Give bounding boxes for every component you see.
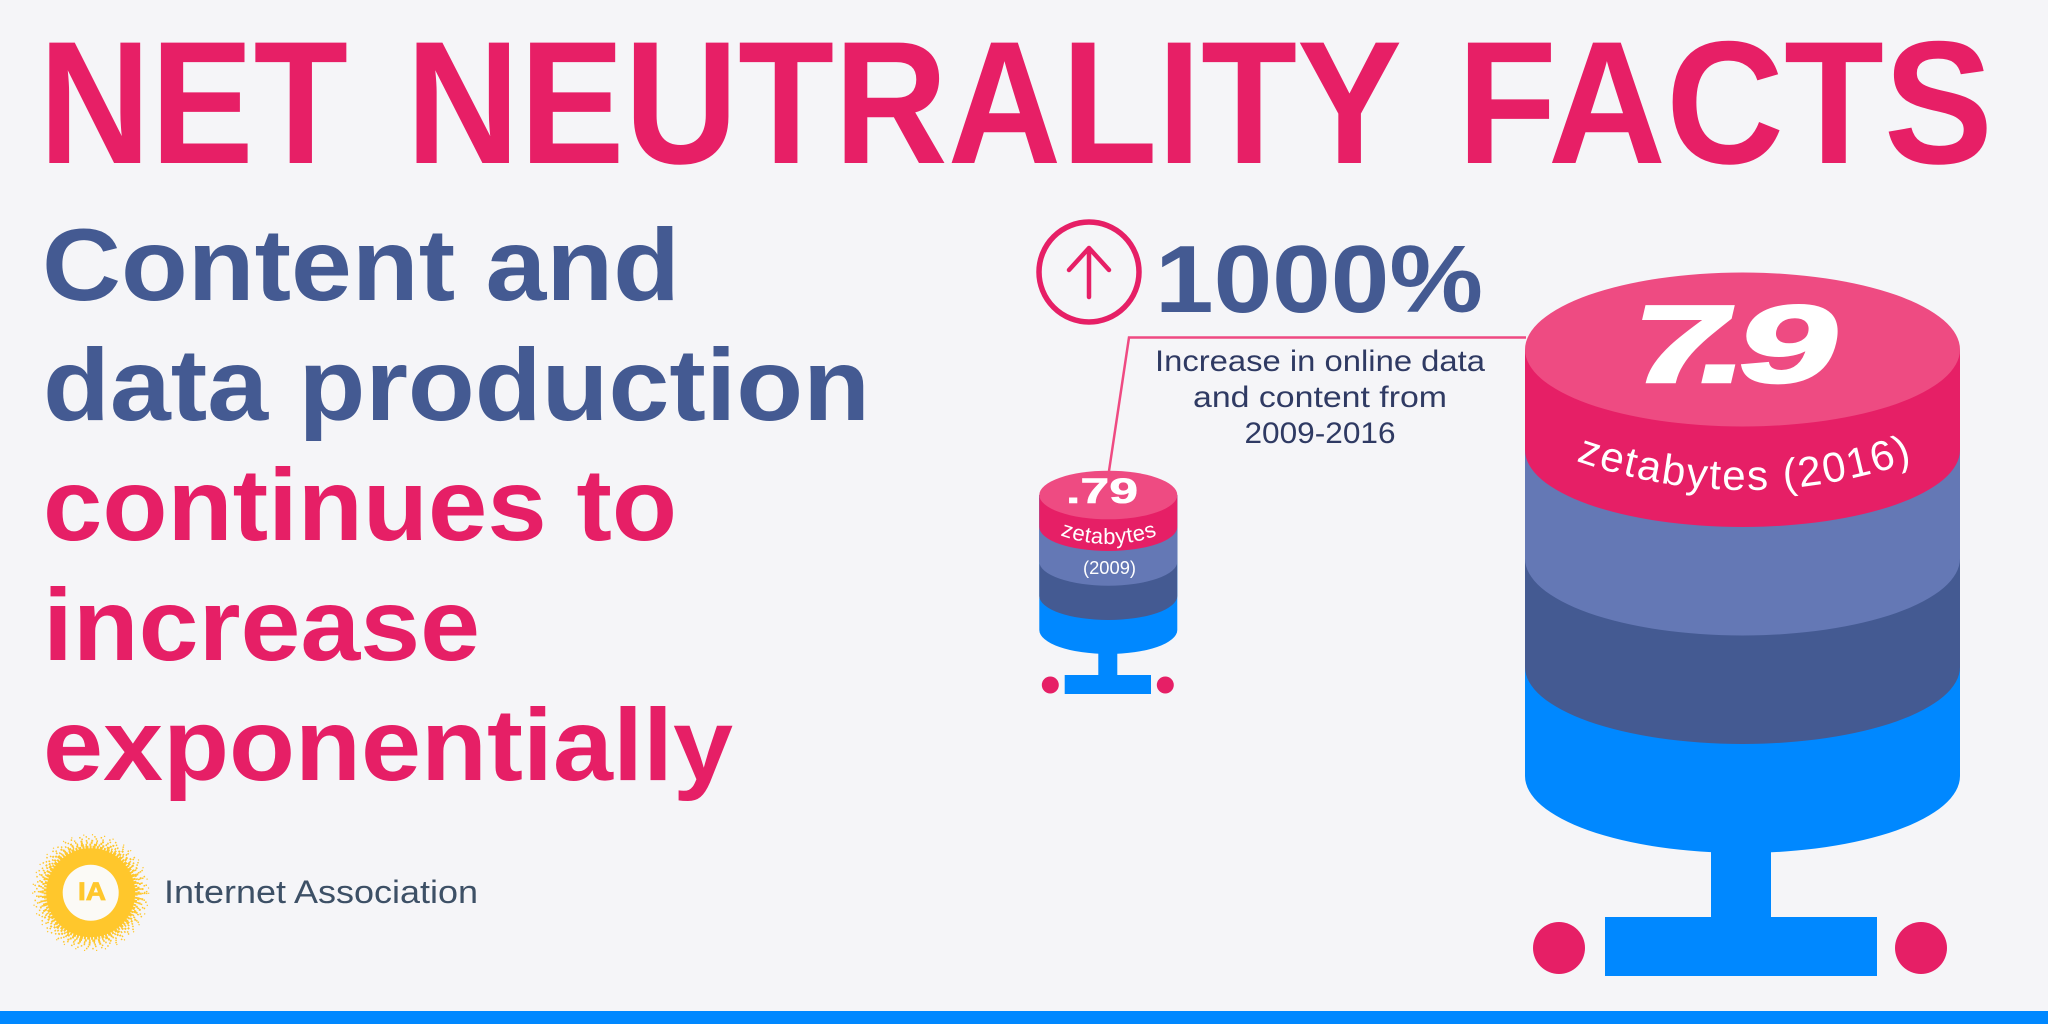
stat: 1000%: 1000% [1155, 226, 1483, 333]
small label 2009: (2009) [1083, 558, 1136, 578]
title: NET [39, 6, 348, 201]
chart: large cylinder 2016: zetabytes (2016) [1578, 436, 1908, 496]
large cylinder base [1525, 350, 1960, 976]
description: increase in online data: Increase in online data [1155, 345, 1485, 378]
description: increase in online data: and content from [1193, 381, 1447, 414]
heading line: data production: data production [43, 328, 870, 442]
heading line: content and: Content and [42, 208, 680, 322]
large cylinder layers [1525, 272, 1960, 744]
small cylinder dots [1042, 676, 1174, 694]
description: increase in online data: 2009-2016 [1244, 417, 1396, 450]
small cylinder layers [1039, 471, 1177, 620]
heading line: exponentially: exponentially [43, 688, 733, 802]
connector line between cylinders [1109, 338, 1526, 471]
small label zetabytes [1054, 533, 1164, 544]
bottom bar [0, 1011, 2048, 1024]
icon: up arrow in circle [1039, 222, 1139, 322]
chart: small cylinder 2009 [1039, 470, 1178, 694]
title: NEUTRALITY [406, 6, 1402, 201]
title: FACTS [1457, 6, 1993, 201]
icon: yellow speckled sun [33, 835, 149, 951]
large value 7.9: 7.9 [1616, 283, 1855, 406]
heading: content and data production continues to increase exponentially [42, 208, 870, 802]
icon: white centre circle [63, 865, 119, 921]
title [39, 6, 1993, 201]
small value .79: .79 [1066, 472, 1138, 511]
heading line: continues to: continues to [43, 448, 677, 562]
large label zetabytes 2016 [1560, 455, 1930, 490]
large cylinder dots [1533, 922, 1947, 974]
small cylinder base [1039, 495, 1177, 694]
logo letters IA: IA [78, 878, 106, 906]
logo wordmark: Internet Association [164, 874, 478, 910]
description: increase in online data [1155, 345, 1485, 450]
chart: large cylinder 2016 [1525, 272, 1960, 976]
heading line: increase: increase [43, 568, 480, 682]
chart: small cylinder 2009: zetabytes [1061, 524, 1156, 548]
logo: Internet Association [33, 835, 478, 951]
